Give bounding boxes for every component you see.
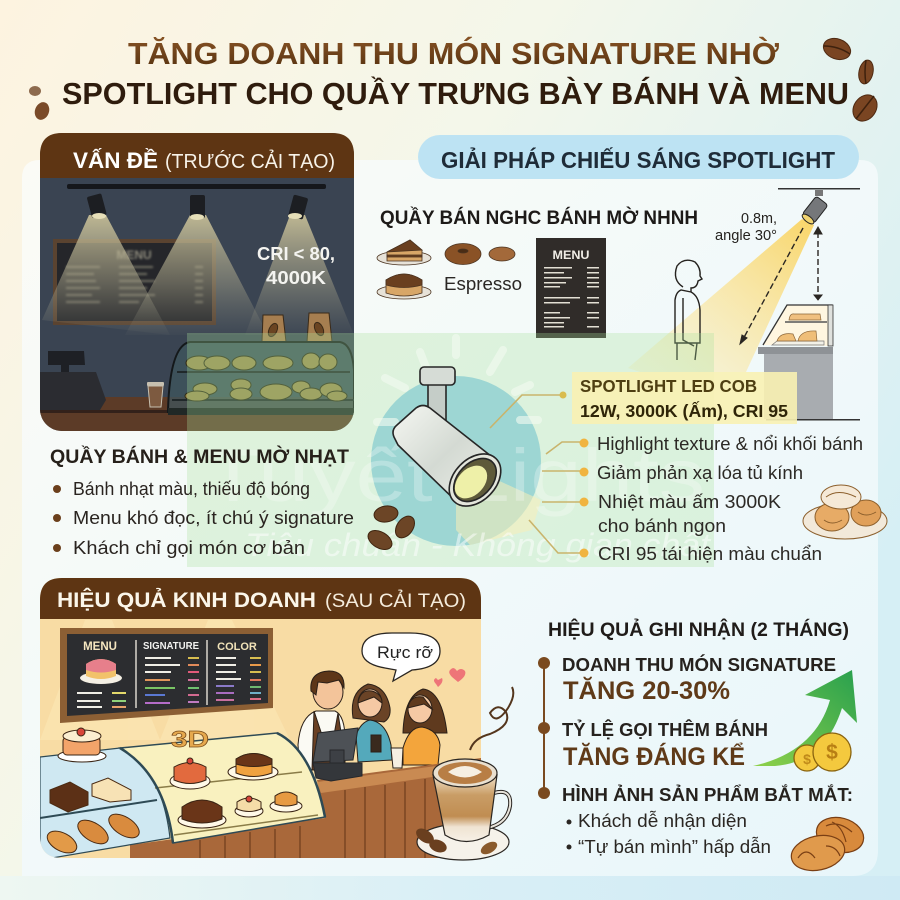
icon: pastries on plate [803, 485, 887, 539]
coffee bags [262, 313, 332, 342]
icon: gold coins: $ [803, 751, 811, 767]
icon: coffee beans top right [820, 35, 882, 126]
bakery display case [168, 342, 354, 415]
after header band [40, 578, 481, 619]
pastry display case [758, 305, 860, 420]
ceiling track [778, 188, 860, 190]
signature menu board: COLOR [217, 641, 257, 653]
feature list: Giảm phản xạ lóa tủ kính [597, 463, 803, 483]
right lit display case [120, 733, 325, 843]
problem bullet list: Khách chỉ gọi món cơ bản [73, 538, 305, 558]
icon: gold coins [794, 733, 851, 771]
results heading: HIỆU QUẢ GHI NHẬN (2 THÁNG) [548, 619, 849, 641]
feature list: CRI 95 tái hiện màu chuẩn [598, 544, 822, 564]
menu board blurred [53, 239, 216, 325]
result: upsell rate: TỶ LỆ GỌI THÊM BÁNH [562, 719, 768, 740]
watermark rays [377, 338, 538, 422]
label: CRI 4000K: CRI < 80, [257, 244, 335, 264]
problem bullet list [50, 446, 354, 558]
result: product appeal [562, 784, 853, 857]
result: signature revenue: TĂNG 20-30% [563, 676, 730, 705]
main content card [22, 160, 878, 876]
result: signature revenue: DOANH THU MÓN SIGNATURE [562, 654, 836, 675]
light beams [42, 215, 354, 335]
icon: gold coins: $ [826, 741, 838, 764]
label: distance and angle: angle 30° [715, 228, 777, 244]
watermark overlay [187, 333, 714, 567]
label: distance and angle: 0.8m, [741, 211, 777, 227]
person outline [675, 260, 702, 360]
label: espresso: Espresso [444, 273, 522, 294]
icon: hearts [434, 668, 465, 687]
customer in orange shirt [391, 689, 447, 768]
solution heading pill [418, 135, 859, 179]
icon: coffee beans top left [29, 86, 52, 122]
left glass pastry case [40, 748, 170, 860]
light cone [628, 219, 814, 372]
after header band: (SAU CẢI TẠO) [325, 590, 466, 612]
spotlight fixtures [87, 193, 308, 220]
icon: coffee beans near fixture [365, 504, 418, 553]
speech bubble: Rực rỡ [377, 643, 433, 662]
icon: menu card: MENU [552, 248, 590, 262]
paper coffee cup [147, 382, 164, 407]
callout: spotlight spec: SPOTLIGHT LED COB [580, 376, 757, 396]
problem header band: (TRƯỚC CẢI TẠO) [165, 150, 335, 173]
dashed distance arrows [741, 228, 803, 343]
problem header band [40, 133, 354, 178]
label: distance and angle [715, 211, 777, 244]
signature menu board: MENU [83, 641, 117, 653]
watermark tagline: Tiêu chuẩn - Không gian chất [245, 527, 711, 563]
signature menu board [60, 628, 273, 723]
feature list: Highlight texture & nổi khối bánh [597, 434, 863, 454]
result: upsell rate: TĂNG ĐÁNG KỂ [563, 742, 745, 771]
icon: COB spotlight fixture [393, 367, 511, 516]
POS terminal [313, 728, 362, 781]
icon: croissants [788, 812, 868, 875]
spot beams [40, 620, 290, 740]
problem header band: VẤN ĐỀ [73, 148, 158, 173]
diagram: spotlight angle and counter [628, 188, 860, 420]
watermark sun circle [371, 376, 541, 546]
icon: cakes and donuts [377, 240, 515, 299]
cake on top of case [58, 728, 106, 762]
label: CRI 4000K [258, 247, 334, 284]
timeline [538, 657, 550, 799]
callout: spotlight spec [572, 372, 797, 424]
watermark wordmark: Tuyết Lights [205, 434, 705, 517]
result: product appeal: “Tự bán mình” hấp dẫn [578, 836, 771, 857]
result: signature revenue [562, 654, 836, 705]
cash register [40, 351, 106, 410]
panel: business results after renovation [40, 578, 481, 860]
result: upsell rate [562, 719, 768, 771]
result: product appeal: HÌNH ẢNH SẢN PHẨM BẮT MẮT: [562, 784, 853, 805]
after header band: HIỆU QUẢ KINH DOANH [57, 588, 316, 612]
solution heading pill: GIẢI PHÁP CHIẾU SÁNG SPOTLIGHT [441, 145, 835, 173]
callout dots [560, 392, 588, 558]
problem bullet list: Menu khó đọc, ít chú ý signature [73, 508, 354, 528]
icon: latte cup [413, 687, 513, 860]
pastries in case [185, 353, 347, 401]
problem scene background [40, 133, 354, 431]
icon: rising green arrow [753, 670, 857, 766]
title [62, 35, 849, 111]
speech bubble [362, 633, 440, 681]
cakes right [170, 754, 302, 828]
barista [298, 671, 345, 770]
icon: menu card [536, 238, 606, 338]
feature list: cho bánh ngon [598, 516, 726, 536]
track light rail [67, 184, 326, 189]
panel: problem before renovation [40, 133, 354, 431]
mini spotlight [801, 190, 828, 226]
result: product appeal: Khách dễ nhận diện [578, 810, 747, 831]
menu board blurred: MENU [116, 248, 152, 262]
label: 3D: 3D [171, 726, 209, 752]
problem bullet list: Bánh nhạt màu, thiếu độ bóng [73, 479, 310, 499]
subheading: dim counter: QUẦY BÁN NGHC BÁNH MỜ NHNH [380, 207, 698, 229]
counter with wood planks [130, 758, 481, 860]
counter [40, 397, 354, 431]
feature list: Nhiệt màu ấm 3000K [598, 492, 781, 512]
problem bullet list: QUẦY BÁNH & MENU MỜ NHẠT [50, 446, 349, 468]
callout: spotlight spec: 12W, 3000K (Ấm), CRI 95 [580, 400, 788, 421]
title: TĂNG DOANH THU MÓN SIGNATURE NHỜ [128, 35, 780, 71]
feature list [597, 434, 863, 564]
pastries left [46, 778, 140, 854]
latte steam [470, 687, 513, 750]
after scene background [40, 578, 481, 860]
callout connector lines [490, 395, 582, 553]
label: CRI 4000K: 4000K [266, 268, 326, 288]
customer in teal shirt [352, 684, 392, 762]
title: SPOTLIGHT CHO QUẦY TRƯNG BÀY BÁNH VÀ MENU [62, 76, 849, 111]
signature menu board: SIGNATURE [143, 640, 199, 652]
